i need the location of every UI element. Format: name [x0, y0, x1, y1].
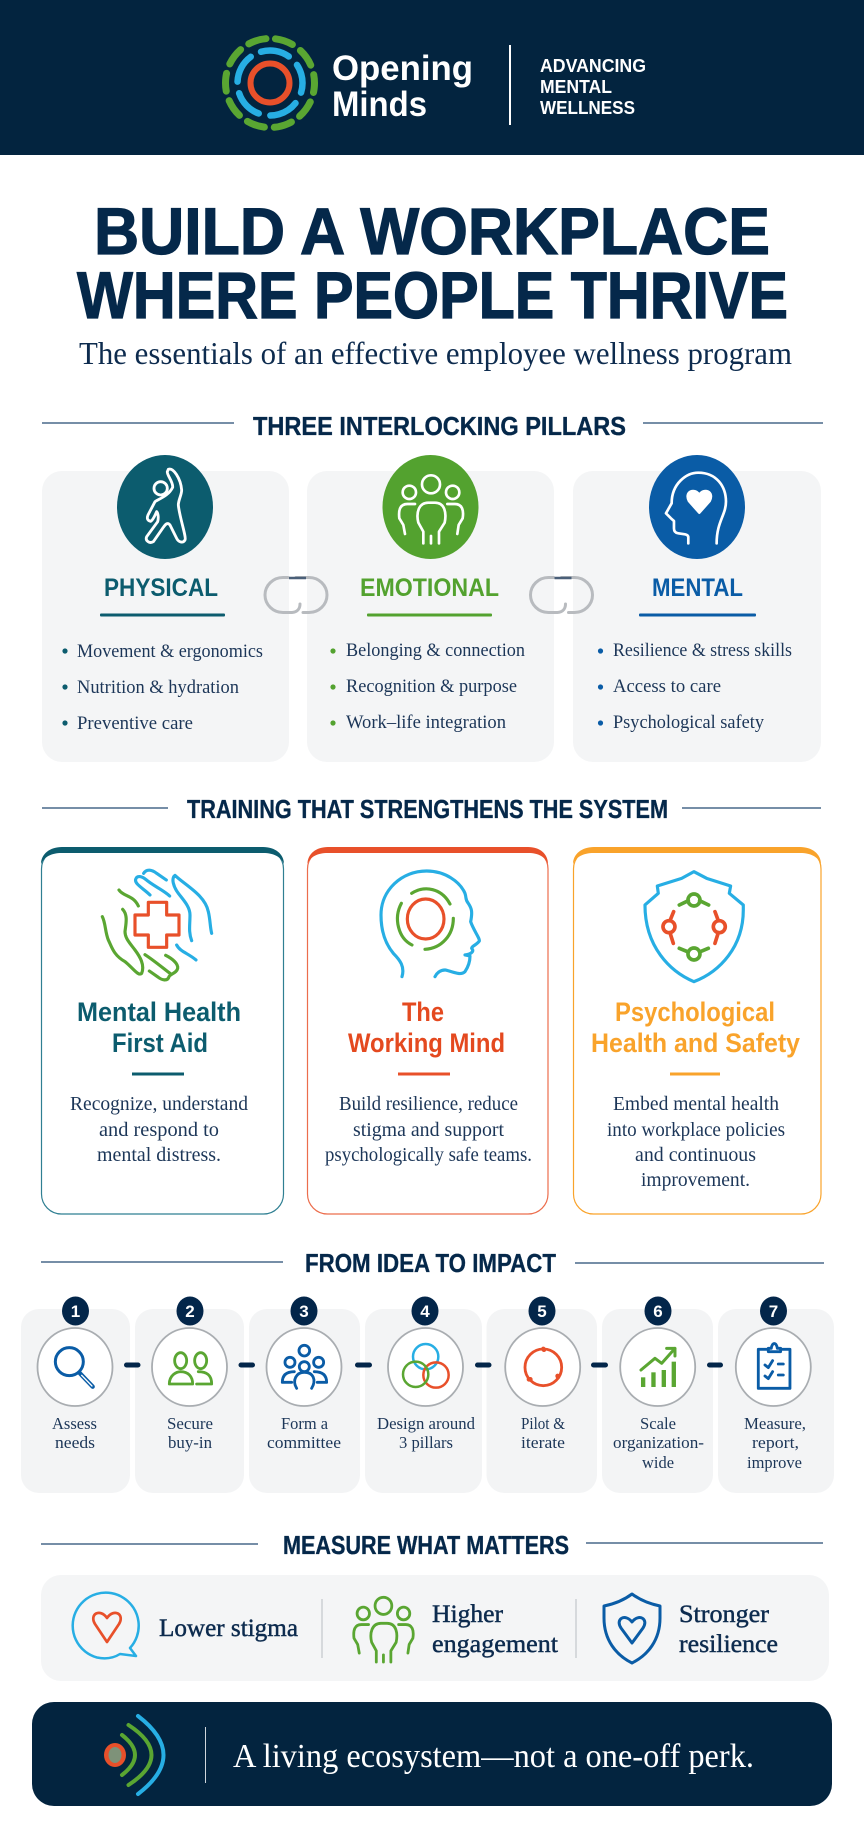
course description: stigma and support — [353, 1119, 504, 1141]
step label: Assess — [52, 1414, 97, 1433]
bullet list: Belonging & connection — [346, 640, 525, 661]
course description: Recognize, understand — [70, 1093, 248, 1115]
icon: clipboard checklist — [758, 1344, 790, 1388]
subtitle: The essentials of an effective employee wellness program — [79, 335, 792, 371]
step 1: assess needs: 1 — [71, 1302, 80, 1321]
course title — [348, 997, 505, 1058]
step label: report, — [752, 1433, 799, 1452]
panel: mental — [573, 455, 821, 762]
bullet list: Work–life integration — [346, 712, 506, 733]
step label: Pilot & — [521, 1414, 565, 1433]
step 6: scale organization-wide — [602, 1296, 713, 1493]
metric: higher engagement — [354, 1597, 558, 1662]
step 4: design around 3 pillars — [365, 1296, 482, 1493]
heading: measure what matters: MEASURE WHAT MATTERS — [283, 1530, 569, 1560]
step connectors — [126, 1362, 720, 1368]
course description: improvement. — [641, 1169, 750, 1191]
brand name: Minds — [332, 85, 427, 124]
bullet list: Resilience & stress skills — [613, 640, 792, 661]
step label: needs — [55, 1433, 95, 1452]
step label — [52, 1414, 97, 1452]
course description: Embed mental health — [613, 1093, 779, 1115]
metric: stronger resilience — [604, 1594, 778, 1663]
course description: mental distress. — [97, 1144, 221, 1166]
icon: ripple signal — [104, 1716, 164, 1794]
metric: stronger resilience: resilience — [679, 1631, 778, 1658]
metric: lower stigma: Lower stigma — [159, 1615, 298, 1642]
step label — [377, 1414, 475, 1452]
bullet list — [330, 640, 525, 733]
icon: shield with nodes — [645, 872, 743, 982]
step label: buy-in — [168, 1433, 212, 1452]
icon: Opening Minds logo — [220, 33, 320, 133]
course title — [591, 997, 800, 1058]
step label — [521, 1414, 565, 1452]
step 7: measure report improve — [718, 1296, 834, 1493]
step label: Design around — [377, 1414, 475, 1433]
course description — [325, 1093, 532, 1166]
course title: Working Mind — [348, 1028, 505, 1058]
step 3: form a committee: 3 — [299, 1302, 309, 1321]
step label: committee — [267, 1433, 341, 1452]
bullet list: Psychological safety — [613, 712, 764, 733]
panel: physical — [42, 455, 289, 762]
icon: chain link one — [265, 578, 327, 612]
bullet list — [62, 641, 263, 734]
course description — [70, 1093, 248, 1166]
panel: mental health first aid — [41, 847, 284, 1214]
course title — [77, 997, 241, 1058]
bullet list — [598, 640, 792, 733]
course description: and continuous — [635, 1144, 756, 1166]
bullet list: Access to care — [613, 676, 721, 697]
step 5: pilot and iterate — [486, 1296, 597, 1493]
course title: Psychological — [615, 997, 775, 1027]
title: WHERE PEOPLE THRIVE — [77, 258, 788, 332]
icon: hands around cross — [102, 870, 212, 980]
course description: Build resilience, reduce — [339, 1093, 518, 1115]
bullet list: Preventive care — [77, 713, 193, 734]
step 4: design around 3 pillars: 4 — [420, 1302, 430, 1321]
heading: training: TRAINING THAT STRENGTHENS THE SYSTEM — [187, 794, 668, 824]
icon: stretching person — [117, 455, 213, 559]
step label: iterate — [521, 1433, 565, 1452]
step label: 3 pillars — [399, 1433, 453, 1452]
tagline: WELLNESS — [540, 98, 635, 118]
tagline: MENTAL — [540, 77, 612, 97]
step 2: secure buy-in — [135, 1296, 244, 1493]
step 6: scale organization-wide: 6 — [653, 1302, 663, 1321]
step 2: secure buy-in: 2 — [185, 1302, 195, 1321]
step label: Secure — [167, 1414, 213, 1433]
course description: and respond to — [99, 1119, 219, 1141]
bullet list: Nutrition & hydration — [77, 677, 239, 698]
panel: the working mind — [308, 847, 548, 1214]
bullet list: Movement & ergonomics — [77, 641, 263, 662]
label: physical: PHYSICAL — [104, 574, 218, 602]
icon: iteration loop — [525, 1349, 562, 1386]
closing statement: A living ecosystem—not a one-off perk. — [233, 1738, 754, 1775]
icon: head with rings — [381, 871, 479, 977]
label: mental: MENTAL — [652, 574, 743, 602]
icon: magnifier — [55, 1348, 93, 1387]
step label: improve — [747, 1453, 802, 1472]
course title: Mental Health — [77, 997, 241, 1027]
metric: stronger resilience: Stronger — [679, 1601, 770, 1628]
icon: head with heart — [649, 455, 745, 559]
panel: emotional — [307, 455, 554, 762]
course description: into workplace policies — [607, 1119, 785, 1141]
icon: venn circles — [403, 1344, 449, 1388]
heading: three interlocking pillars: THREE INTERLOCKING PILLARS — [253, 411, 626, 441]
course description: psychologically safe teams. — [325, 1144, 532, 1166]
title: BUILD A WORKPLACE — [94, 194, 770, 268]
icon: chain link two — [530, 578, 592, 612]
panel: metrics — [41, 1575, 829, 1681]
step label — [613, 1414, 704, 1472]
step label: Form a — [281, 1414, 328, 1433]
panel: psychological health and safety — [573, 847, 821, 1214]
brand name: Opening — [332, 49, 473, 88]
step 7: measure report improve: 7 — [769, 1302, 778, 1321]
icon: growth chart — [641, 1348, 676, 1387]
bullet list: Recognition & purpose — [346, 676, 517, 697]
step label: Measure, — [744, 1414, 806, 1433]
course description — [607, 1093, 785, 1191]
brand name — [332, 49, 473, 124]
step label: organization- — [613, 1433, 704, 1452]
course title: Health and Safety — [591, 1028, 800, 1058]
step label — [267, 1414, 341, 1452]
metric: higher engagement: engagement — [432, 1631, 558, 1658]
metric: higher engagement: Higher — [432, 1601, 504, 1628]
header band — [0, 0, 864, 155]
step 1: assess needs — [21, 1296, 130, 1493]
tagline — [540, 56, 646, 118]
step label — [167, 1414, 213, 1452]
footer banner — [32, 1702, 832, 1806]
icon: group of people — [382, 455, 478, 559]
icon: committee — [282, 1345, 327, 1388]
icon: two people — [169, 1353, 212, 1384]
step 3: form a committee — [249, 1296, 360, 1493]
step label: wide — [642, 1453, 674, 1472]
tagline: ADVANCING — [540, 56, 646, 76]
label: emotional: EMOTIONAL — [360, 574, 499, 602]
step label — [744, 1414, 806, 1472]
step 5: pilot and iterate: 5 — [537, 1302, 547, 1321]
step label: Scale — [640, 1414, 676, 1433]
title — [77, 194, 788, 332]
course title: First Aid — [112, 1028, 208, 1058]
metric: lower stigma — [73, 1593, 298, 1658]
heading: from idea to impact: FROM IDEA TO IMPACT — [305, 1248, 556, 1278]
course title: The — [402, 997, 444, 1027]
